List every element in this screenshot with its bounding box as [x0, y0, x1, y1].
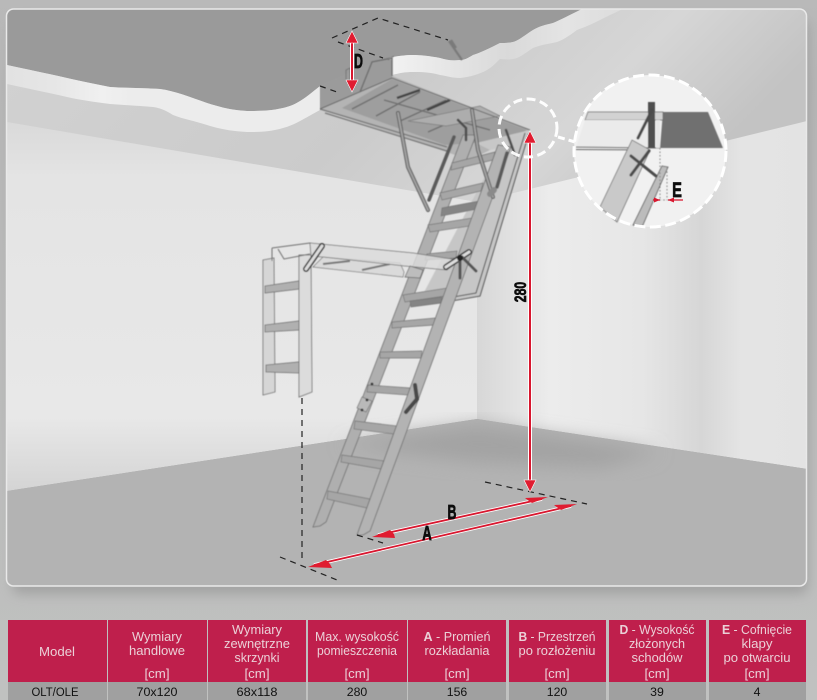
- dashed circle outline: [574, 75, 726, 227]
- column: D - Wysokosc zlozonych schodow: 39: [650, 685, 664, 699]
- arrow: B: [372, 497, 548, 538]
- frame shadow: [12, 20, 808, 594]
- front post: [299, 255, 312, 397]
- column: Model: Model: [39, 645, 75, 659]
- lower ladder hinge: [357, 383, 417, 412]
- ladder rungs: [327, 152, 495, 508]
- column: Wymiary handlowe: [cm]: [144, 667, 170, 681]
- column: E - Cofniecie klapy po otwarciu: [cm]: [744, 667, 770, 681]
- ladder left stringer: [313, 135, 476, 527]
- column: D - Wysokosc zlozonych schodow: złożonych: [629, 637, 685, 651]
- column: E - Cofniecie klapy po otwarciu: E - Cofnięcie: [722, 623, 792, 637]
- door board: [633, 166, 668, 227]
- landing platform: [272, 243, 458, 278]
- door panel behind ladder: [420, 133, 529, 303]
- column: Model: OLT/OLE: [32, 685, 78, 699]
- column: Max. wysokosc pomieszczenia: 280: [347, 685, 367, 699]
- dashed guide lines: [280, 18, 587, 580]
- column: Max. wysokosc pomieszczenia: [315, 630, 399, 699]
- column: E - Cofniecie klapy po otwarciu: 4: [754, 685, 761, 699]
- column: Wymiary zewnetrzne skrzynki: [cm]: [244, 667, 270, 681]
- column: E - Cofniecie klapy po otwarciu: klapy: [742, 637, 773, 651]
- column: A - Promien rozkladania: rozkładania: [424, 644, 490, 658]
- label B: B: [448, 501, 456, 524]
- column: A - Promien rozkladania: A - Promień: [424, 630, 491, 644]
- column: B - Przestrzen po rozlozeniu: [cm]: [544, 667, 570, 681]
- rear support strut: [449, 40, 462, 60]
- arrow: D height: [346, 31, 358, 92]
- column: Wymiary zewnetrzne skrzynki: 68x118: [236, 685, 278, 699]
- column: B - Przestrzen po rozlozeniu: [518, 630, 596, 699]
- dark upper ceiling: [7, 9, 582, 111]
- connector to detail circle: [558, 137, 575, 142]
- column: A - Promien rozkladania: [cm]: [444, 667, 470, 681]
- column: D - Wysokosc zlozonych schodow: [cm]: [644, 667, 670, 681]
- hatch interior: [320, 76, 530, 160]
- detail circle: flap setback E: [574, 75, 726, 227]
- white ceiling section band, right: [392, 9, 623, 78]
- setback arrows: [653, 199, 683, 201]
- setback guide lines: [660, 148, 667, 200]
- floor: [7, 419, 807, 586]
- column: D - Wysokosc zlozonych schodow: [620, 623, 694, 699]
- ceiling: [7, 9, 807, 209]
- column: D - Wysokosc zlozonych schodow: D - Wysokość: [620, 623, 694, 637]
- column: Wymiary handlowe: handlowe: [129, 644, 185, 658]
- data row cells: [8, 682, 806, 700]
- frame strip: [585, 112, 663, 120]
- column: E - Cofniecie klapy po otwarciu: po otwarciu: [724, 651, 791, 665]
- table: dimensions: [8, 620, 806, 700]
- label 280: 280: [512, 282, 531, 302]
- arrow: 280 height: [524, 131, 536, 492]
- attic hatch opening: [320, 40, 530, 160]
- right wall: [477, 121, 807, 469]
- ladder stringer: [600, 140, 650, 222]
- column: Max. wysokosc pomieszczenia: pomieszczenia: [317, 644, 397, 658]
- side ladder of landing: [263, 255, 312, 397]
- folding arms and struts: [398, 110, 515, 210]
- column: A - Promien rozkladania: 156: [447, 685, 467, 699]
- column: Wymiary handlowe: Wymiary: [132, 630, 183, 644]
- side rungs: [265, 281, 299, 293]
- column: Model: [32, 645, 78, 699]
- folded ladder sections in hatch: [352, 58, 490, 132]
- small dashed highlight circle: [499, 99, 557, 157]
- ladder right stringer: [357, 145, 511, 535]
- floor shadow: [340, 425, 660, 468]
- column: Wymiary handlowe: [129, 630, 185, 699]
- white ceiling section band, left: [7, 65, 320, 132]
- column: B - Przestrzen po rozlozeniu: B - Przestrzeń: [518, 630, 596, 644]
- column: Wymiary zewnetrzne skrzynki: skrzynki: [234, 651, 280, 665]
- header cells: [8, 620, 806, 682]
- column: D - Wysokosc zlozonych schodow: schodów: [632, 651, 683, 665]
- ceiling block: [660, 112, 723, 148]
- column: Max. wysokosc pomieszczenia: [cm]: [344, 667, 370, 681]
- column: Wymiary zewnetrzne skrzynki: [224, 623, 290, 699]
- back post: [263, 258, 275, 395]
- column: B - Przestrzen po rozlozeniu: 120: [547, 685, 567, 699]
- column: E - Cofniecie klapy po otwarciu: [722, 623, 792, 699]
- landing hinges: [306, 246, 476, 278]
- arrow: A: [308, 504, 577, 568]
- label A: A: [422, 522, 432, 545]
- label D: D: [354, 50, 363, 73]
- column: Wymiary zewnetrzne skrzynki: Wymiary: [232, 623, 283, 637]
- column: Max. wysokosc pomieszczenia: Max. wysokość: [315, 630, 399, 644]
- left wall: [7, 122, 477, 491]
- label E: E: [672, 178, 682, 202]
- column: B - Przestrzen po rozlozeniu: po rozłożeniu: [518, 644, 596, 658]
- column: Wymiary handlowe: 70x120: [136, 685, 178, 699]
- column: A - Promien rozkladania: [424, 630, 491, 699]
- hatch frame edge: [320, 109, 447, 151]
- hinge mechanism: [648, 102, 655, 148]
- column: Wymiary zewnetrzne skrzynki: zewnętrzne: [224, 637, 290, 651]
